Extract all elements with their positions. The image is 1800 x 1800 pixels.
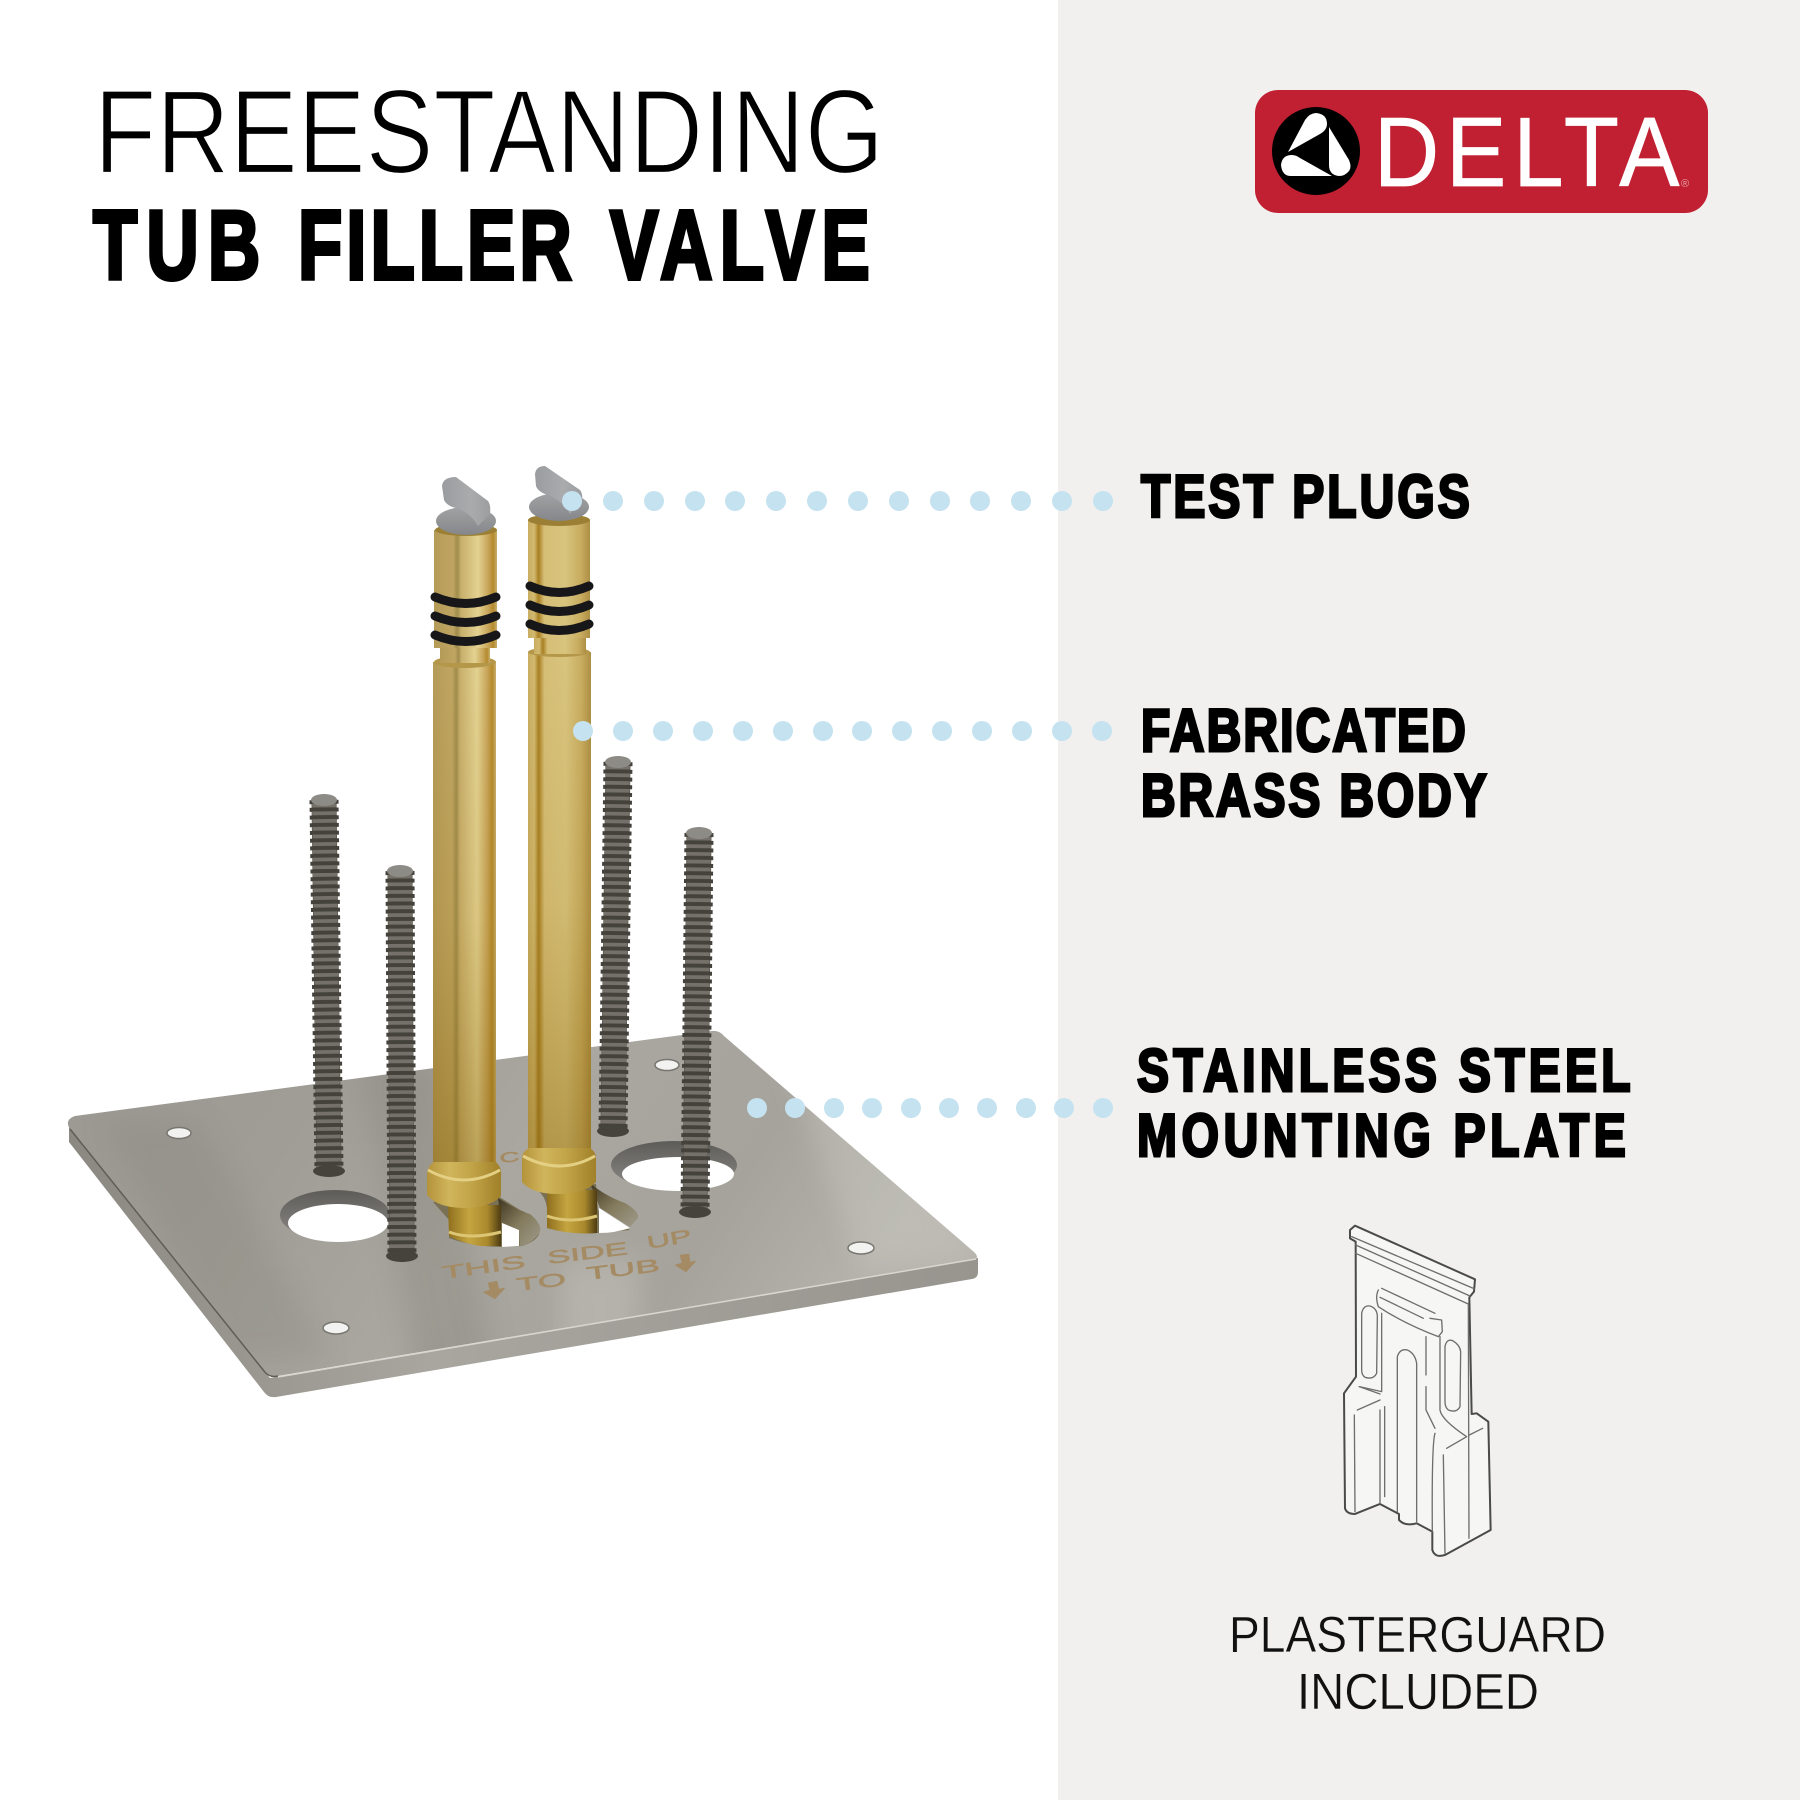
logo red badge [1255, 90, 1708, 213]
left test plug [436, 507, 496, 535]
registered mark: ® [1681, 178, 1689, 190]
plate holes [280, 1141, 737, 1247]
right pipe body [528, 652, 591, 1157]
right pipe neck [534, 636, 586, 654]
plate engraving: TO [515, 1269, 567, 1295]
right pipe head [528, 520, 590, 638]
plate engraving: C [499, 1148, 520, 1166]
right pipe o-rings [530, 586, 589, 630]
title [93, 65, 884, 301]
caption: plasterguard included: PLASTERGUARD [1229, 1606, 1606, 1663]
caption: plasterguard included: INCLUDED [1297, 1663, 1539, 1720]
label: fabricated brass body: FABRICATED [1141, 697, 1466, 764]
left pipe head [434, 530, 497, 648]
right pipe lower stem [547, 1190, 597, 1233]
title line: TUB FILLER VALVE: TUB [93, 191, 260, 301]
plate engraving [441, 1148, 696, 1299]
plate engraving: UP [645, 1225, 693, 1253]
title line: TUB FILLER VALVE [93, 191, 870, 301]
left pipe lower stem [448, 1205, 501, 1246]
threaded rod rear right [597, 756, 631, 1137]
left pipe collar [427, 1162, 501, 1208]
logo wordmark: DELTA [1374, 98, 1680, 207]
dotted leader: brass body [573, 721, 1112, 741]
threaded rod rear left [311, 794, 345, 1177]
label: stainless steel mounting plate: MOUNTING PLATE [1137, 1102, 1626, 1169]
plate engraving: THIS [441, 1251, 527, 1283]
label: test plugs: TEST PLUGS [1141, 463, 1470, 530]
title line: TUB FILLER VALVE: FILLER [298, 191, 572, 301]
plate engraving: TUB [585, 1255, 661, 1284]
label: fabricated brass body [1141, 697, 1487, 829]
label: stainless steel mounting plate [1137, 1037, 1631, 1169]
threaded rod front left [386, 865, 418, 1262]
dotted leader: mounting plate [747, 1098, 1113, 1118]
right test plug [529, 493, 589, 521]
title line: TUB FILLER VALVE: VALVE [610, 191, 870, 301]
dotted leader: test plugs [562, 491, 1113, 511]
caption: plasterguard included [1229, 1606, 1606, 1720]
right brass pipe with test plug [522, 466, 597, 1233]
left pipe o-rings [435, 597, 496, 642]
plate engraving: SIDE [546, 1238, 629, 1268]
left pipe neck [440, 645, 490, 663]
label: stainless steel mounting plate: STAINLESS STEEL [1137, 1037, 1631, 1104]
rivets [167, 1060, 874, 1334]
mounting plate [68, 1031, 980, 1400]
title line: FREESTANDING: FREESTANDING [94, 65, 884, 199]
right pipe collar [522, 1148, 596, 1194]
threaded rod front right [679, 827, 712, 1218]
logo: Delta [1255, 90, 1708, 213]
left brass pipe with test plug [427, 477, 501, 1246]
label: fabricated brass body: BRASS BODY [1141, 762, 1487, 829]
product photo: valve on mounting plate [68, 466, 980, 1400]
left pipe body [433, 662, 496, 1172]
panel: right grey background [1058, 0, 1800, 1800]
icon: Delta emblem [1272, 107, 1360, 195]
icon: plasterguard line drawing [1344, 1226, 1491, 1556]
